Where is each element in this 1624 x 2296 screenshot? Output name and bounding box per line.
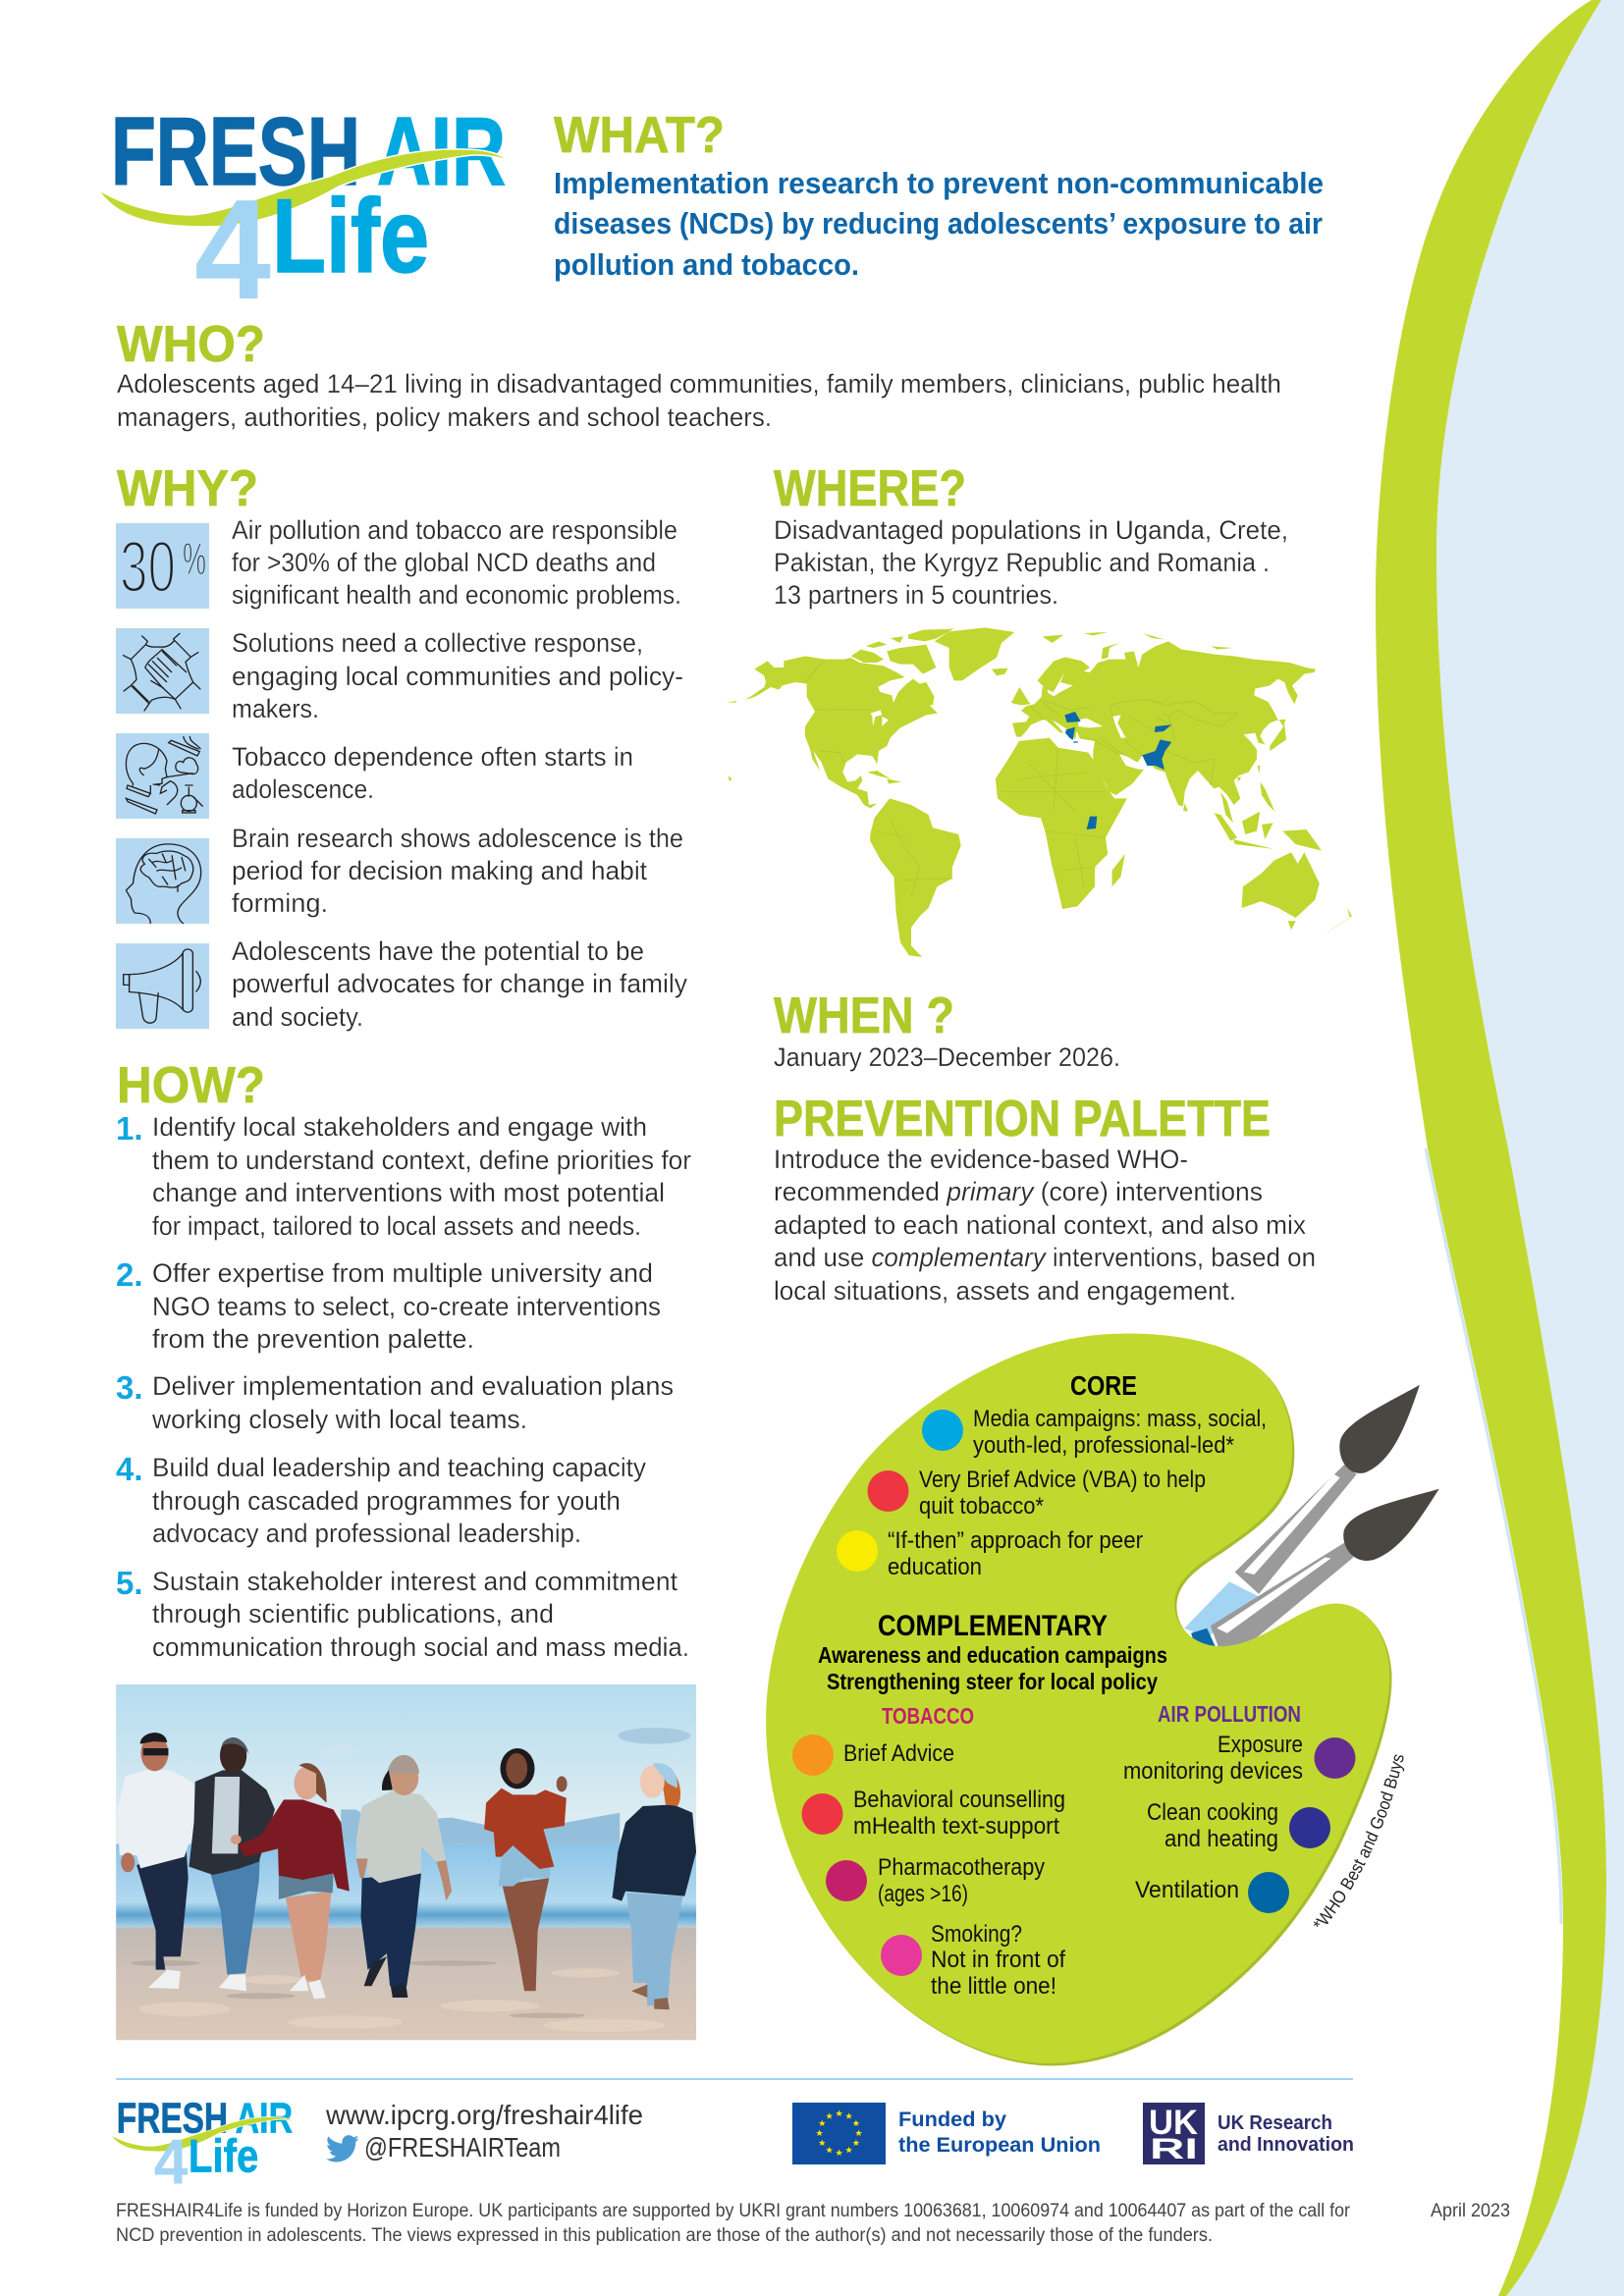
footer logo: FRESHAIR4Life: FRESH [117,2095,228,2143]
text: reason 5: Adolescents have the potential to be [232,936,644,966]
step 2 [116,1256,661,1354]
section: air pollution: and heating [1164,1826,1278,1852]
text block: palette description: and use complementary interventions, based on [774,1243,1316,1272]
section: core: Media campaigns: mass, social, [973,1406,1267,1432]
section: core: Very Brief Advice (VBA) to help [919,1467,1206,1493]
heading: WHY?: WHY? [117,460,258,517]
footer rule [116,2078,1353,2080]
panel: how steps [116,1110,691,1662]
text: reason 5 [232,936,687,1032]
text block: palette description: local situations, assets and engagement. [774,1276,1236,1306]
funding statement: NCD prevention in adolescents. The views expressed in this publication are those of the author(s) and not necessarily those of the funders. [116,2225,1213,2246]
section: tobacco: Smoking? [931,1921,1022,1948]
icon: 30 percent: 30 [120,526,176,608]
text: reason 1 [232,515,681,610]
footer logo: FRESHAIR4Life: Life [189,2130,258,2182]
section: tobacco: Pharmacotherapy [878,1854,1045,1881]
text block: palette description: Introduce the evidence-based WHO- [774,1145,1188,1174]
step 5: through scientific publications, and [152,1599,554,1629]
text block: palette description: recommended primary (core) interventions [774,1177,1263,1206]
text: reason 1: for >30% of the global NCD deaths and [232,548,656,577]
icon: twitter bird [326,2135,359,2162]
text: reason 3 [232,742,633,804]
heading: HOW?: HOW? [117,1057,265,1114]
section: complementary: COMPLEMENTARY [878,1610,1108,1642]
logo: UKRI [1143,2103,1354,2165]
icon: megaphone [116,943,209,1029]
heading: PREVENTION PALETTE: PREVENTION PALETTE [774,1091,1271,1148]
text: reason 2: Solutions need a collective response, [232,628,643,658]
section: tobacco: (ages >16) [878,1881,968,1907]
text: reason 3: Tobacco dependence often starts in [232,742,633,772]
logo: EU flag and funding: the European Union [898,2134,1101,2157]
step 4: through cascaded programmes for youth [152,1486,621,1516]
southern landmasses [870,738,1352,957]
logo: FRESHAIR4Life [98,97,508,329]
eurasia [1011,632,1316,841]
section: tobacco: Not in front of [931,1947,1065,1973]
section: air pollution: Exposure [1218,1732,1303,1758]
north america [727,627,1021,808]
step 1: them to understand context, define priorities for [152,1146,691,1175]
logo: UKRI: UK Research [1218,2112,1332,2134]
logo: UKRI: RI [1150,2133,1198,2165]
partner countries [1064,712,1171,829]
icon: joined hands [116,628,209,714]
text block: palette description: adapted to each national context, and also mix [774,1210,1306,1240]
icon: 30 percent: % [183,533,206,584]
logo: EU flag and funding: Funded by [898,2109,1006,2131]
panel: why list [116,515,687,1032]
funding statement: FRESHAIR4Life is funded by Horizon Europe. UK participants are supported by UKRI grant numbers 10063681, 10060974 and 10064407 as part of the call for [116,2201,1351,2221]
person 3 [231,1763,350,2000]
step 3 [116,1369,674,1434]
background wave [1376,0,1624,2296]
section: complementary: Awareness and education campaigns [818,1642,1167,1668]
step 1: Identify local stakeholders and engage with [152,1112,647,1142]
text: reason 2: makers. [232,694,319,723]
text block: what description: diseases (NCDs) by reducing adolescents’ exposure to air [554,206,1323,240]
logo: FRESHAIR4Life: Life [272,177,429,294]
heading: WHEN?: WHEN ? [774,988,954,1044]
text block: who description [117,369,1281,432]
step 5: Sustain stakeholder interest and commitment [152,1567,677,1596]
step 2: from the prevention palette. [152,1324,474,1354]
person 6 [612,1763,696,2009]
text block: what description: Implementation research to prevent non-communicable [554,166,1324,200]
icon: paint brushes [1184,1385,1439,1653]
person 5 [484,1748,568,1991]
section: tobacco: TOBACCO [882,1703,974,1729]
text block: where description: Disadvantaged populations in Uganda, Crete, [774,515,1288,545]
text block: where description: 13 partners in 5 countries. [774,580,1058,610]
text block: who description: Adolescents aged 14–21 living in disadvantaged communities, family members, clinicians, public health [117,369,1281,399]
person 4 [356,1755,452,1998]
text: reason 1: Air pollution and tobacco are responsible [232,515,677,545]
palette board [766,1334,1392,2065]
footer logo: FRESHAIR4Life [111,2095,294,2197]
step 4 [116,1451,646,1548]
heading: WHAT?: WHAT? [554,107,725,164]
step 5: communication through social and mass media. [152,1632,689,1662]
section: air pollution [1123,1701,1355,1913]
step 5: 5. [116,1565,143,1601]
step 2: 2. [116,1256,143,1293]
section: air pollution: Clean cooking [1147,1799,1278,1826]
logo: FRESHAIR4Life: FRESH [111,97,360,205]
text: reason 1: significant health and economic problems. [232,580,681,610]
step 5 [116,1565,689,1662]
text block: what description [554,166,1324,282]
section: air pollution: AIR POLLUTION [1158,1701,1301,1727]
logo: UKRI: and Innovation [1218,2134,1354,2156]
section: air pollution: monitoring devices [1123,1758,1303,1785]
step 3: 3. [116,1369,143,1406]
person 1 [118,1733,208,1989]
text: dates: January 2023–December 2026. [774,1042,1120,1072]
step 1: for impact, tailored to local assets and needs. [152,1211,641,1241]
logo: UKRI: UK [1149,2104,1198,2142]
text: reason 5: and society. [232,1002,363,1032]
step 3: working closely with local teams. [151,1405,527,1434]
text: reason 2: engaging local communities and policy- [232,662,683,691]
section: complementary [818,1610,1167,1694]
heading: WHO?: WHO? [117,316,265,373]
footnote: WHO best buys: *WHO Best and Good Buys [1314,1755,1404,1928]
section: core: education [888,1554,982,1580]
section: complementary: Strengthening steer for local policy [827,1669,1158,1694]
footer twitter handle: @FRESHAIRTeam [364,2132,561,2163]
text block: palette description [774,1145,1316,1306]
text block: what description: pollution and tobacco. [554,247,859,282]
section: tobacco: the little one! [931,1973,1056,2000]
footer logo: FRESHAIR4Life: AIR [236,2095,293,2143]
section: core: quit tobacco* [919,1493,1044,1520]
person 2 [189,1737,275,1991]
text block: who description: managers, authorities, policy makers and school teachers. [117,402,772,432]
step 1: change and interventions with most potential [152,1178,665,1207]
logo: FRESHAIR4Life: AIR [377,97,506,205]
text: reason 2 [232,628,683,723]
section: core: “If-then” approach for peer [888,1527,1143,1554]
logo: FRESHAIR4Life: 4 [194,170,271,329]
section: tobacco: Brief Advice [843,1740,954,1767]
section: core: CORE [1070,1370,1137,1401]
step 4: advocacy and professional leadership. [152,1519,581,1548]
icon: tobacco products [116,733,209,819]
section: tobacco: mHealth text-support [853,1813,1059,1840]
text block: where description: Pakistan, the Kyrgyz Republic and Romania . [774,548,1270,577]
footer logo: FRESHAIR4Life: 4 [154,2125,189,2197]
photo: young people walking on a beach [116,1684,696,2040]
text: reason 4: Brain research shows adolescence is the [232,824,683,853]
footer link: www.ipcrg.org/freshair4life [325,2100,643,2130]
funding statement [116,2201,1351,2246]
section: air pollution: Ventilation [1135,1877,1239,1903]
world map [727,627,1352,957]
logo: EU flag and funding [792,2103,1101,2164]
step 3: Deliver implementation and evaluation plans [152,1371,674,1401]
chart: prevention palette [766,1333,1439,2065]
section: core [837,1370,1267,1580]
icon: brain in head [116,838,209,924]
text: reason 4 [232,824,683,918]
step 4: 4. [116,1451,143,1487]
heading: WHERE?: WHERE? [774,460,966,517]
date: April 2023 [1431,2201,1510,2221]
section: core: youth-led, professional-led* [973,1432,1234,1459]
step 1 [116,1110,691,1241]
text block: where description [774,515,1288,610]
step 4: Build dual leadership and teaching capacity [152,1453,646,1482]
step 1: 1. [116,1110,143,1147]
section: tobacco: Behavioral counselling [853,1787,1065,1813]
text: reason 5: powerful advocates for change in family [232,969,687,998]
text: reason 3: adolescence. [232,774,374,804]
text: reason 4: forming. [232,888,328,918]
step 2: Offer expertise from multiple university and [152,1258,653,1288]
section: tobacco [792,1703,1065,2000]
text: reason 4: period for decision making and habit [232,856,647,885]
step 2: NGO teams to select, co-create interventions [152,1292,661,1321]
